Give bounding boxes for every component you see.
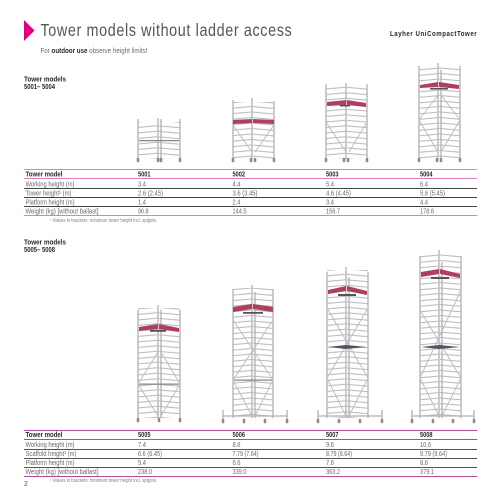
tower 5002 (233, 98, 274, 161)
table: models 5005-5008 (24, 430, 477, 476)
section heading: towers 5005-5008: 5005– 5008 (24, 245, 55, 254)
table: models 5001-5004: 156.7 (326, 206, 340, 215)
table: models 5001-5004: 3.4 (138, 179, 146, 188)
section heading: towers 5001-5004: 5001– 5004 (24, 82, 55, 91)
table: models 5001-5004: 96.8 (138, 206, 148, 215)
table: models 5005-5008: 6.6 (232, 458, 240, 467)
table: models 5001-5004: 5004 (420, 169, 432, 178)
table: models 5001-5004: 6.4 (420, 179, 428, 188)
table: models 5005-5008: 7.6 (326, 458, 334, 467)
table: models 5001-5004: 4.4 (420, 197, 428, 206)
tower 5008 (412, 250, 474, 422)
table: models 5005-5008: Tower model (26, 430, 63, 439)
table: models 5001-5004: Platform height (m) (26, 197, 74, 206)
table: models 5005-5008: 8.6 (420, 458, 428, 467)
section heading: towers 5005-5008: Tower models (24, 238, 66, 246)
table: models 5001-5004: Tower height¹ (m) (26, 188, 72, 197)
table: models 5005-5008: 363.2 (326, 467, 340, 476)
title: Tower models without ladder access (40, 21, 292, 40)
table: models 5005-5008: 5005 (138, 430, 150, 439)
tower 5001 (138, 118, 180, 161)
table: models 5001-5004: 5.6 (5.45) (420, 188, 445, 197)
table: models 5005-5008: 9.79 (9.64) (420, 449, 447, 458)
section heading: towers 5001-5004 (24, 74, 66, 91)
table: models 5001-5004: 2.4 (232, 197, 240, 206)
table: models 5001-5004: 3.6 (3.45) (232, 188, 258, 197)
table: models 5005-5008: Working height (m) (26, 440, 74, 449)
table: models 5005-5008: 7.4 (138, 440, 146, 449)
table: models 5001-5004: 2.6 (2.45) (138, 188, 163, 197)
table: models 5005-5008: 339.0 (232, 467, 246, 476)
table: models 5005-5008: 5.4 (138, 458, 146, 467)
product name: Layher UniCompactTower (390, 31, 477, 38)
table: models 5005-5008: 7.79 (7.64) (232, 449, 258, 458)
table: models 5001-5004: 3.4 (326, 197, 334, 206)
table: models 5001-5004 (24, 169, 477, 216)
table: models 5001-5004: Weight (kg) [without ballast] (26, 206, 98, 215)
footnote: ¹ Values in brackets: minimum tower height incl. spigots. (50, 478, 157, 484)
table: models 5001-5004: 4.6 (4.45) (326, 188, 351, 197)
table: models 5005-5008: 5008 (420, 430, 432, 439)
page number: 2 (24, 481, 28, 488)
tower 5005 (138, 305, 180, 421)
table: models 5005-5008: Platform height (m) (26, 458, 74, 467)
table: models 5005-5008: 6.6 (6.45) (138, 449, 162, 458)
table: models 5005-5008: Scaffold height¹ (m) (26, 449, 76, 458)
section heading: towers 5001-5004: Tower models (24, 74, 66, 84)
subtitle note: For outdoor use observe height limits! (40, 46, 148, 55)
table: models 5001-5004: 4.4 (232, 179, 240, 188)
table: models 5005-5008: Weight (kg) [without ballast] (26, 467, 98, 476)
table: models 5005-5008: 379.1 (420, 467, 434, 476)
table: models 5001-5004: 144.5 (232, 206, 246, 215)
tower 5003 (326, 83, 367, 161)
table: models 5001-5004: 5002 (232, 169, 245, 178)
table: models 5001-5004: 1.4 (138, 197, 146, 206)
tower 5006 (223, 285, 287, 422)
table: models 5005-5008: 8.79 (8.64) (326, 449, 352, 458)
table: models 5001-5004: 5.4 (326, 179, 334, 188)
table: models 5001-5004: 5003 (326, 169, 338, 178)
table: models 5005-5008: 5007 (326, 430, 338, 439)
table: models 5005-5008: 10.6 (420, 440, 431, 449)
table: models 5005-5008: 8.6 (232, 440, 240, 449)
table: models 5001-5004: 178.6 (420, 206, 434, 215)
table: models 5005-5008: 5006 (232, 430, 245, 439)
icon: magenta triangle marker (24, 20, 34, 41)
footnote: ¹ Values in brackets: minimum tower height incl. spigots. (50, 218, 157, 224)
table: models 5001-5004: Working height (m) (26, 179, 74, 188)
section heading: towers 5005-5008 (24, 238, 66, 254)
table: models 5005-5008: 238.0 (138, 467, 152, 476)
tower 5004 (419, 63, 460, 161)
tower 5007 (318, 267, 382, 422)
table: models 5001-5004: Tower model (26, 169, 63, 178)
table: models 5005-5008: 9.6 (326, 440, 334, 449)
table: models 5001-5004: 5001 (138, 169, 150, 178)
